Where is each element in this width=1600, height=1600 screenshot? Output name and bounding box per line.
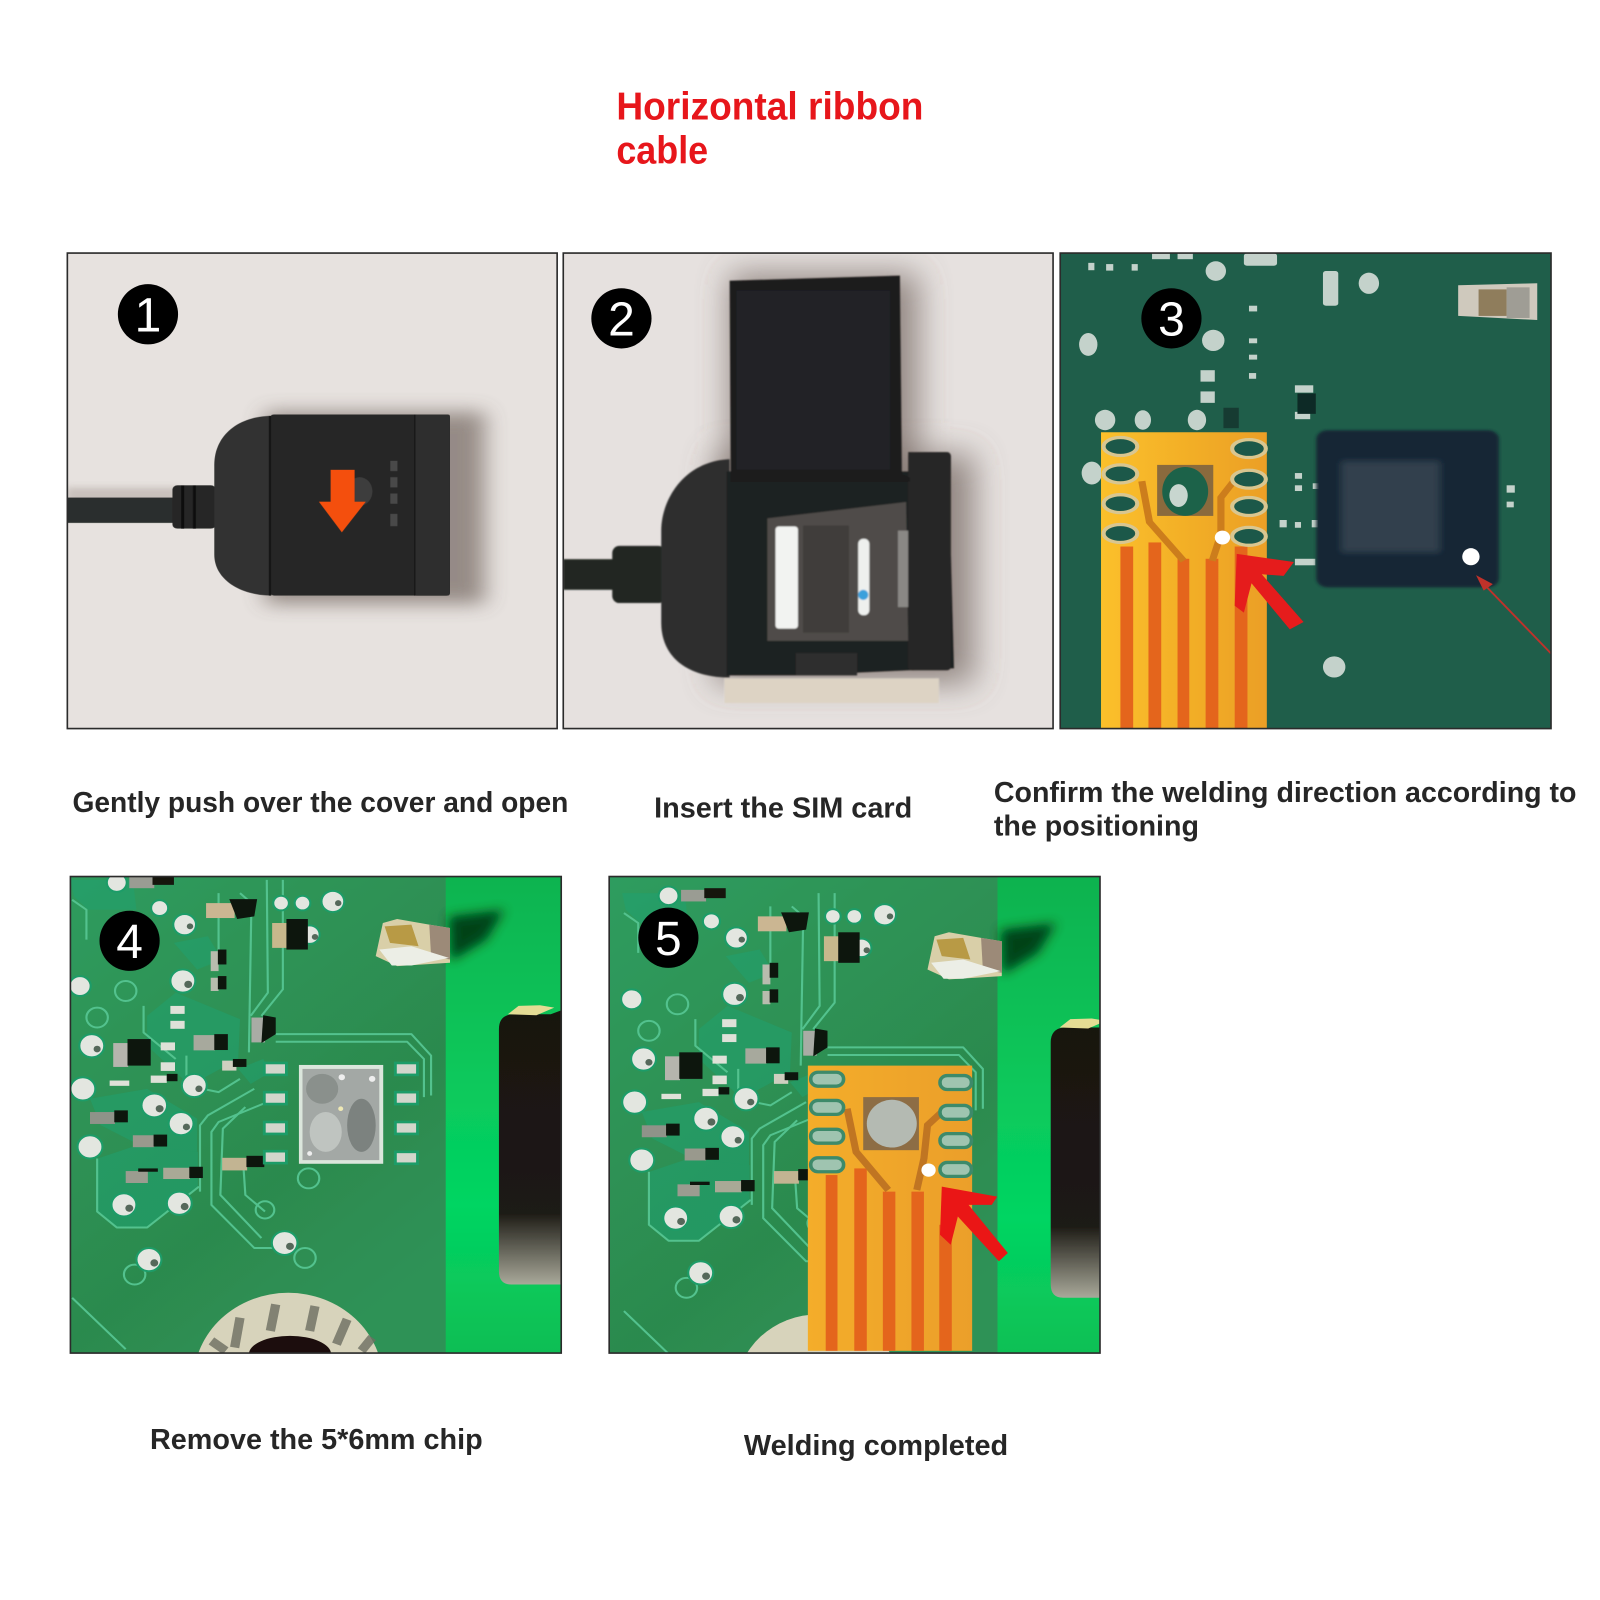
caption 2: Insert the SIM card: [654, 792, 912, 824]
icon: red arrow: [1235, 554, 1304, 629]
title: Horizontal ribbon: [616, 85, 923, 128]
step badge 3: [1141, 288, 1202, 348]
step badge 2: [591, 288, 652, 348]
ribbon cable: [808, 1066, 972, 1351]
exposed silver pad: [299, 1065, 383, 1164]
SIM tray: [767, 502, 908, 641]
caption 1: Gently push over the cover and open: [72, 787, 568, 819]
top right component: [1458, 283, 1537, 320]
solder pads: [264, 1063, 418, 1164]
panel borders: [67, 253, 1551, 1353]
step badge 5: [638, 908, 698, 968]
step badge 2: 2: [608, 294, 635, 347]
silver blobs: [1079, 253, 1515, 678]
panel 4: PCB with chip removed: [71, 877, 560, 1352]
panel 5: ribbon welded on PCB: [610, 877, 1100, 1352]
icon: orange down arrow: [319, 470, 366, 532]
caption 4: Remove the 5*6mm chip: [150, 1424, 483, 1456]
step badge 4: 4: [116, 916, 143, 969]
caption 3: the positioning: [994, 811, 1199, 843]
step badge 4: [99, 911, 160, 971]
title: [616, 85, 923, 172]
panel 3: ribbon positioning against chip: [1060, 253, 1551, 730]
step badge 3: 3: [1158, 294, 1185, 347]
panel 1: SIM holder closed with push arrow: [66, 253, 557, 729]
chip: [1316, 430, 1499, 587]
ribbon cable: [1101, 432, 1267, 730]
step badge 1: 1: [135, 290, 161, 343]
title: cable: [616, 129, 708, 172]
thin red arrow: [1476, 575, 1551, 653]
caption 3: Confirm the welding direction according to: [994, 777, 1577, 809]
caption 3: [994, 777, 1577, 843]
step badge 1: [118, 284, 178, 344]
caption 5: Welding completed: [744, 1430, 1008, 1462]
step badge 5: 5: [655, 913, 682, 966]
icon: red arrow: [940, 1187, 1008, 1261]
panel 2: SIM card inserted: [563, 253, 1053, 729]
washer: [194, 1293, 383, 1469]
